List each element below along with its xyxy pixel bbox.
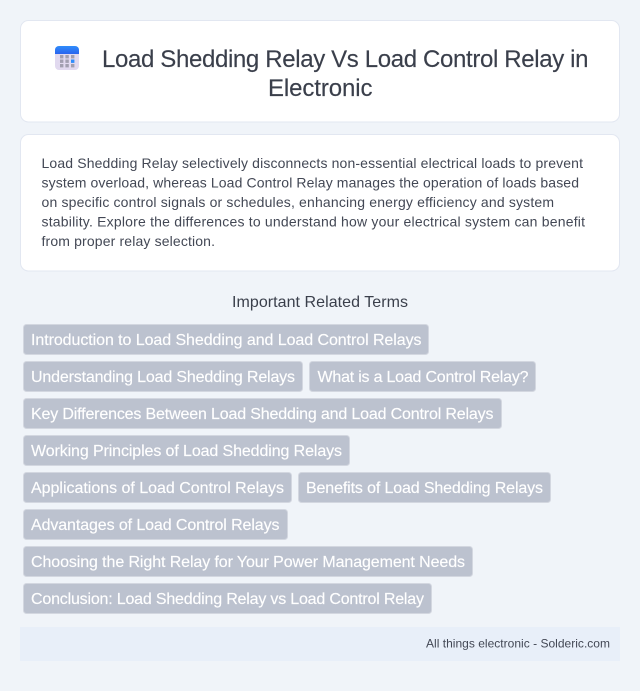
footer: All things electronic - Solderic.com xyxy=(426,636,610,650)
tag: advantages xyxy=(24,510,288,540)
tag: understanding: Understanding Load Shedding Relays xyxy=(31,369,295,386)
tag: benefits xyxy=(298,472,550,502)
footer xyxy=(20,627,620,661)
tag: working principles: Working Principles of Load Shedding Relays xyxy=(31,443,342,460)
tag: conclusion xyxy=(24,584,432,614)
tag: benefits: Benefits of Load Shedding Relays xyxy=(306,480,543,497)
tag: introduction xyxy=(24,324,428,354)
heading: important related terms: Important Related Terms xyxy=(232,294,408,311)
panel: description card xyxy=(20,134,620,271)
title: Electronic xyxy=(268,75,372,102)
text block: description: Load Shedding Relay selectively disconnects non-essential electrical loads to prevent xyxy=(42,155,583,171)
panel: related term tags xyxy=(24,324,550,614)
tag: introduction: Introduction to Load Shedding and Load Control Relays xyxy=(31,332,422,349)
tag: key differences: Key Differences Between Load Shedding and Load Control Relays xyxy=(31,406,494,423)
text block: description: stability. Explore the differences to understand how your electrical system can benefit xyxy=(42,214,585,230)
tag: applications: Applications of Load Control Relays xyxy=(31,480,284,497)
tag: what is xyxy=(310,362,536,392)
text block: description: system overload, whereas Load Control Relay manages the operation of loads based xyxy=(42,174,579,190)
icon: calendar xyxy=(55,46,79,70)
title xyxy=(102,46,588,102)
title: Load Shedding Relay Vs Load Control Relay in xyxy=(102,46,588,73)
tag: conclusion: Conclusion: Load Shedding Relay vs Load Control Relay xyxy=(31,591,424,608)
text block: description xyxy=(42,155,585,249)
text block: description: from proper relay selection. xyxy=(42,233,215,249)
tag: working principles xyxy=(24,436,350,466)
tag: advantages: Advantages of Load Control Relays xyxy=(31,517,280,534)
text block: description: on specific control signals or schedules, enhancing energy efficiency and system xyxy=(42,194,554,210)
tag: choosing xyxy=(24,546,472,576)
tag: what is: What is a Load Control Relay? xyxy=(318,369,529,386)
tag: key differences xyxy=(24,398,502,428)
tag: understanding xyxy=(24,362,302,392)
panel: header card xyxy=(20,20,620,122)
tag: choosing: Choosing the Right Relay for Your Power Management Needs xyxy=(31,554,465,571)
tag: applications xyxy=(24,472,292,502)
